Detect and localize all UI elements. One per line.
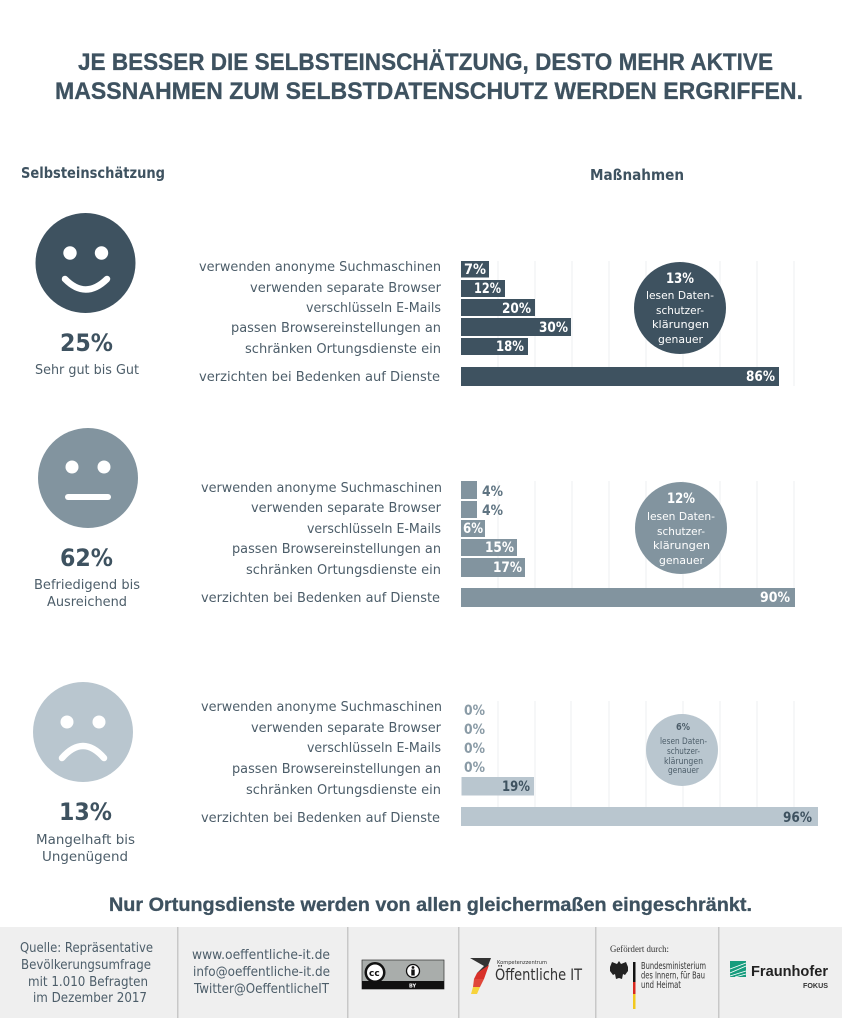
logo: Bundesministerium des Innern, für Bau und Heimat [610, 944, 706, 1009]
logo: Bundesministerium des Innern, für Bau und Heimat: Bundesministerium [641, 961, 706, 972]
title: MASSNAHMEN ZUM SELBSTDATENSCHUTZ WERDEN ERGRIFFEN. [55, 78, 803, 105]
bar chart: befriedigend bis ausreichend: 6% [463, 521, 483, 537]
stat: 62%: 62% [60, 544, 113, 572]
icon: CC BY licence badge: BY [409, 984, 417, 990]
bar chart: befriedigend bis ausreichend: 90% [760, 590, 790, 606]
heading: Maßnahmen: Maßnahmen [590, 166, 684, 184]
labels: measures: passen Browsereinstellungen an [231, 320, 441, 336]
logo: Fraunhofer FOKUS: Fraunhofer [751, 963, 828, 980]
labels: measures [199, 259, 441, 385]
stat: 13%: 13% [59, 798, 112, 826]
labels: measures: verschlüsseln E-Mails [306, 300, 441, 316]
icon: sad face [33, 682, 133, 782]
labels: measures: verwenden separate Browser [251, 500, 441, 516]
callout: 13% [634, 262, 726, 354]
bar chart: sehr gut bis gut: 30% [539, 320, 568, 336]
heading: Selbsteinschätzung: Selbsteinschätzung [21, 164, 165, 182]
bar chart: sehr gut bis gut: 12% [474, 281, 501, 297]
labels: measures: verzichten bei Bedenken auf Dienste [201, 590, 440, 606]
labels: measures: passen Browsereinstellungen an [232, 761, 441, 777]
callout: 12%: 12% [667, 491, 695, 507]
callout: 13%: klärungen [652, 318, 709, 331]
bar chart: befriedigend bis ausreichend: 4% [482, 484, 503, 500]
bar chart: mangelhaft bis ungenügend: 19% [502, 779, 530, 795]
callout: 12%: genauer [659, 554, 704, 567]
footer [0, 927, 842, 1018]
bar chart: befriedigend bis ausreichend [461, 481, 795, 607]
rating label: Sehr gut bis Gut [35, 362, 139, 378]
logo: Bundesministerium des Innern, für Bau und Heimat: des Innern, für Bau [641, 970, 705, 982]
callout: 6%: genauer [668, 766, 699, 776]
takeaway sentence: Nur Ortungsdienste werden von allen gleichermaßen eingeschränkt. [109, 895, 752, 916]
callout: 6%: lesen Daten- [660, 737, 707, 747]
callout: 13%: schutzer- [656, 304, 704, 317]
panel: mangelhaft bis ungenügend [33, 682, 818, 865]
rating label: Befriedigend bis [34, 577, 140, 593]
rating label: Mangelhaft bis [36, 832, 135, 848]
icon: CC BY licence badge [362, 960, 444, 990]
labels: measures: verwenden anonyme Suchmaschinen [201, 480, 442, 496]
rating label: Ausreichend [47, 594, 127, 610]
labels: measures: verzichten bei Bedenken auf Dienste [201, 810, 440, 826]
labels: measures: verzichten bei Bedenken auf Dienste [199, 369, 440, 385]
contact details: info@oeffentliche-it.de [193, 965, 330, 980]
title: JE BESSER DIE SELBSTEINSCHÄTZUNG, DESTO MEHR AKTIVE [78, 49, 773, 76]
labels: measures: schränken Ortungsdienste ein [245, 341, 441, 357]
bar chart: mangelhaft bis ungenügend: 0% [464, 741, 485, 757]
bar chart: befriedigend bis ausreichend: 15% [485, 540, 514, 556]
logo: Bundesministerium des Innern, für Bau und Heimat: und Heimat [641, 980, 681, 991]
bar chart: sehr gut bis gut: 18% [496, 339, 524, 355]
logo: Fraunhofer FOKUS [730, 961, 828, 990]
stat: 25%: 25% [60, 329, 113, 357]
source note: im Dezember 2017 [33, 991, 147, 1006]
labels: measures: verwenden anonyme Suchmaschinen [201, 699, 442, 715]
labels: measures: verschlüsseln E-Mails [307, 521, 441, 537]
bar chart: mangelhaft bis ungenügend: 0% [464, 703, 485, 719]
labels: measures: verwenden anonyme Suchmaschinen [199, 259, 441, 275]
bar chart: befriedigend bis ausreichend: 17% [493, 560, 522, 576]
bar chart: mangelhaft bis ungenügend: 96% [783, 810, 812, 826]
logo: Fraunhofer FOKUS: FOKUS [803, 983, 828, 990]
icon: CC BY licence badge: cc [369, 969, 380, 979]
rating label [34, 577, 140, 610]
icon: happy face [36, 213, 136, 313]
callout: 6%: schutzer- [667, 747, 700, 757]
icon: neutral face [38, 428, 138, 528]
panel: befriedigend bis ausreichend [34, 428, 795, 610]
source note: mit 1.010 Befragten [28, 975, 148, 990]
rating label: Ungenügend [42, 849, 128, 865]
title [55, 49, 803, 105]
labels: measures: verschlüsseln E-Mails [307, 740, 441, 756]
bar chart: mangelhaft bis ungenügend [461, 701, 818, 826]
bar chart: befriedigend bis ausreichend: 4% [482, 503, 503, 519]
callout: 12%: lesen Daten- [647, 510, 715, 523]
callout: 13%: lesen Daten- [646, 289, 714, 302]
callout: 6%: klärungen [664, 757, 703, 767]
callout: 13%: 13% [666, 271, 694, 287]
contact details: www.oeffentliche-it.de [192, 948, 330, 963]
labels: measures: verwenden separate Browser [251, 720, 441, 736]
panel: sehr gut bis gut [35, 213, 794, 386]
callout: 6%: 6% [676, 722, 690, 733]
logo: Kompetenzzentrum Öffentliche IT: Kompetenzzentrum [497, 960, 547, 966]
callout: 6% [646, 714, 718, 786]
bar chart: sehr gut bis gut [461, 261, 794, 386]
labels: measures: verwenden separate Browser [250, 280, 441, 296]
source note [20, 941, 153, 1006]
labels: measures: passen Browsereinstellungen an [232, 541, 441, 557]
bar chart: sehr gut bis gut: 20% [502, 301, 531, 317]
callout: 12%: schutzer- [657, 525, 705, 538]
callout: 12%: klärungen [653, 539, 710, 552]
contact details: Twitter@OeffentlicheIT [193, 982, 329, 997]
contact details [192, 948, 330, 997]
source note: Bevölkerungsumfrage [21, 958, 151, 973]
bar chart: mangelhaft bis ungenügend: 0% [464, 722, 485, 738]
bar chart: mangelhaft bis ungenügend: 0% [464, 760, 485, 776]
logo: Bundesministerium des Innern, für Bau und Heimat: Gefördert durch: [610, 944, 669, 954]
labels: measures [201, 480, 442, 606]
labels: measures: schränken Ortungsdienste ein [246, 562, 441, 578]
rating label [36, 832, 135, 865]
logo: Kompetenzzentrum Öffentliche IT: Öffentliche IT [495, 965, 582, 984]
logo: Kompetenzzentrum Öffentliche IT [470, 958, 582, 994]
callout: 12% [635, 482, 727, 574]
bar chart: sehr gut bis gut: 86% [746, 369, 775, 385]
source note: Quelle: Repräsentative [20, 941, 153, 956]
labels: measures: schränken Ortungsdienste ein [246, 782, 441, 798]
bar chart: sehr gut bis gut: 7% [464, 262, 486, 278]
callout: 13%: genauer [658, 333, 703, 346]
labels: measures [201, 699, 442, 826]
